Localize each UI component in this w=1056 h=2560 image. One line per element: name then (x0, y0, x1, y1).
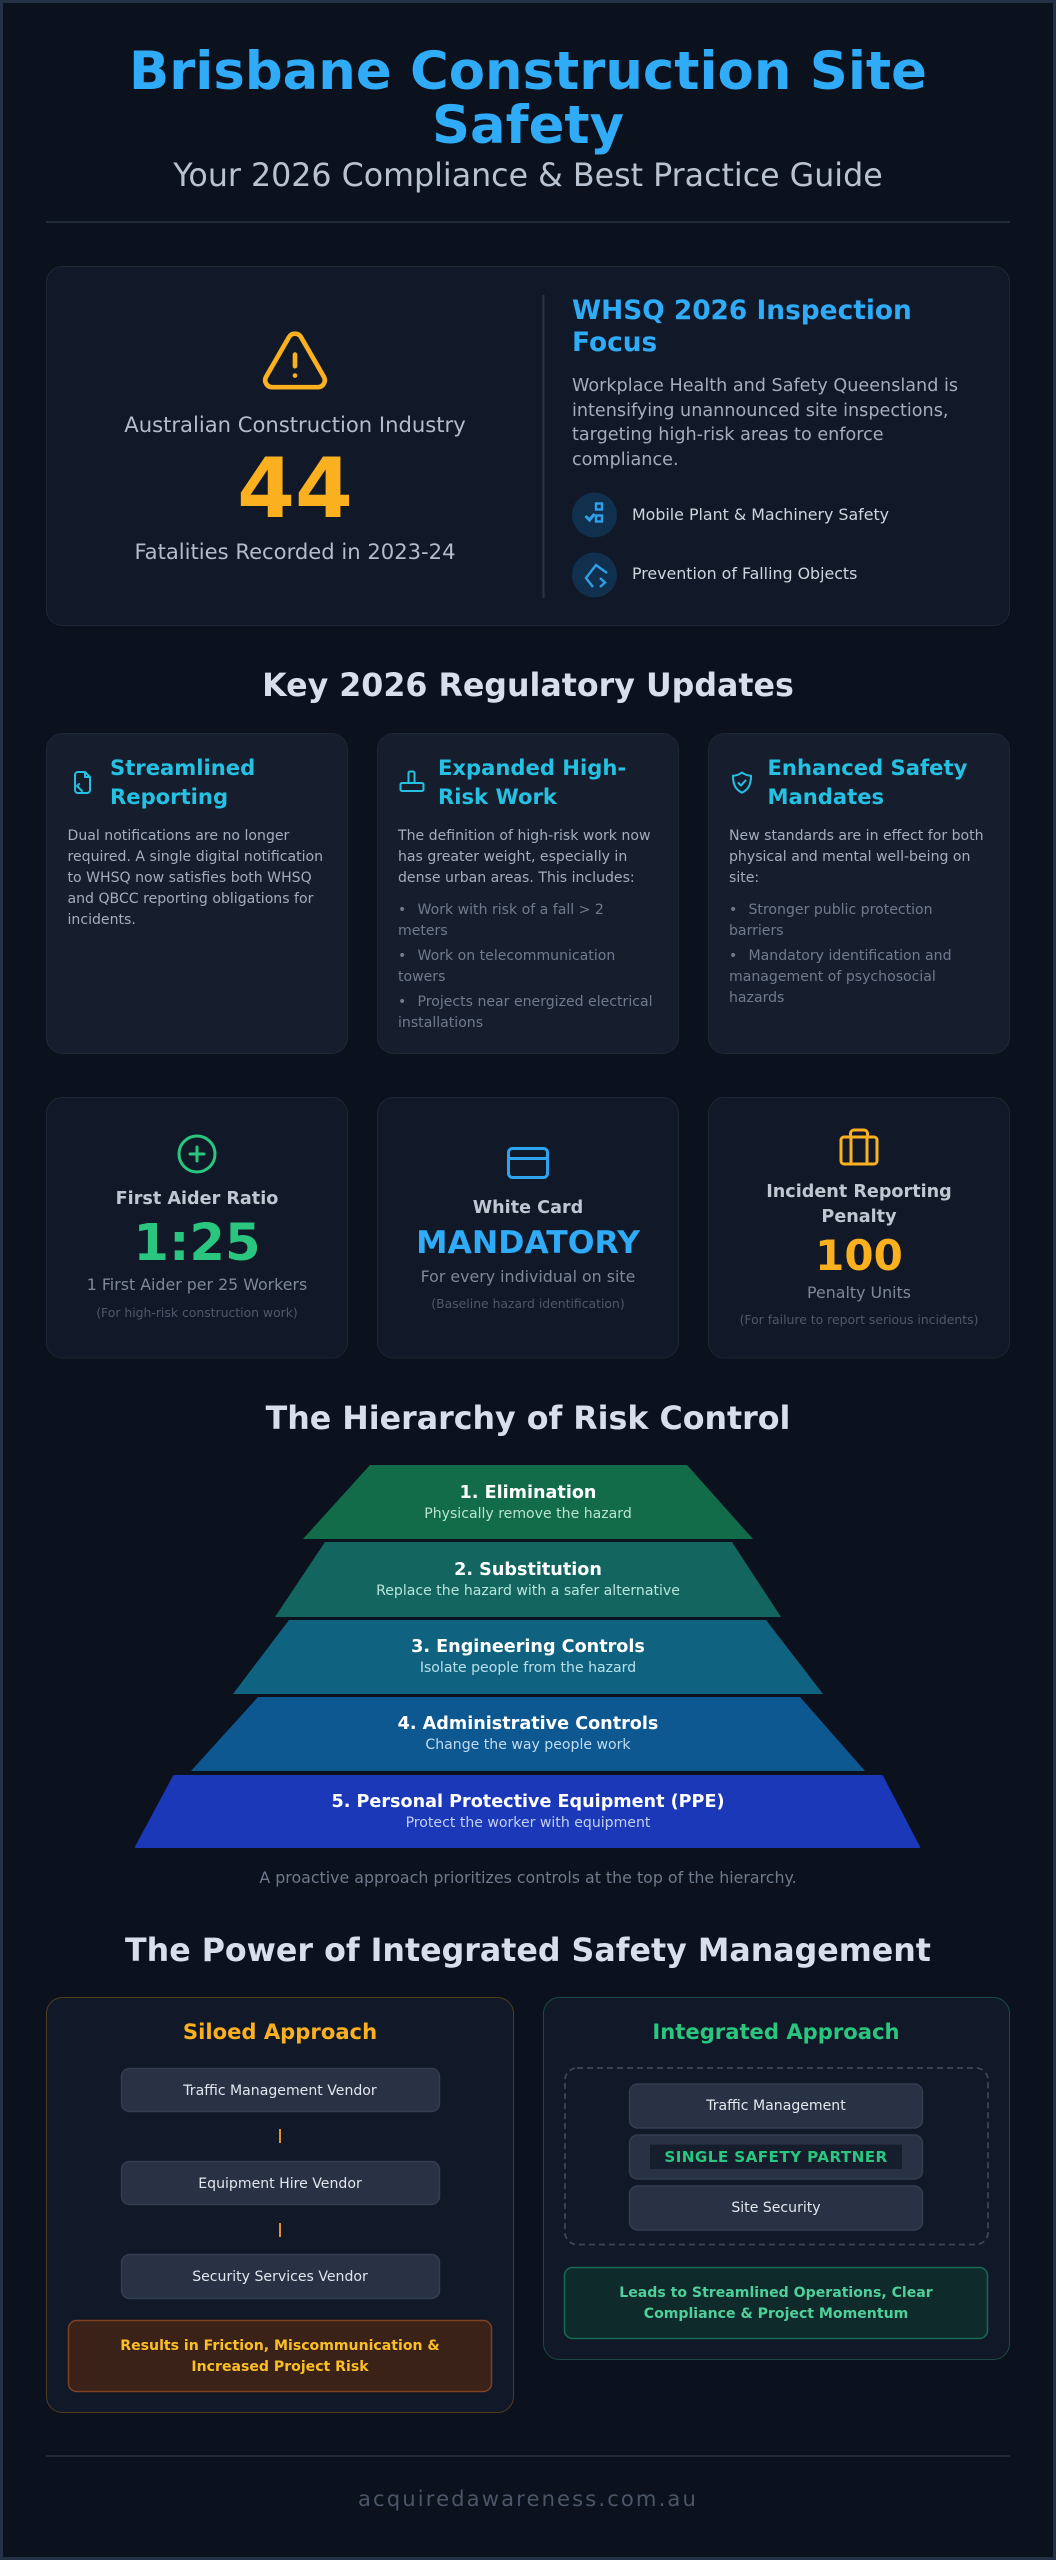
tier 4 (191, 1697, 865, 1771)
item: security (630, 2186, 922, 2230)
tier 4: 4. Administrative Controls (398, 1714, 658, 1734)
panel: white card (378, 1098, 678, 1358)
card text: New standards are in effect for both (729, 828, 984, 844)
connector (279, 2129, 281, 2143)
card heading: Expanded High- (438, 755, 626, 780)
panel: enhanced safety mandates (708, 734, 1010, 1054)
risk list: Projects near energized electrical (418, 994, 653, 1010)
card heading (768, 755, 968, 809)
card text: required. A single digital notification (68, 849, 323, 865)
header (46, 41, 1010, 223)
connector (279, 2223, 281, 2237)
tier 3: Isolate people from the hazard (420, 1660, 636, 1676)
tier 2: 2. Substitution (454, 1560, 602, 1580)
callout: momentum (564, 2268, 988, 2338)
inspection heading: Focus (572, 327, 657, 358)
risk list: Work with risk of a fall > 2 (418, 902, 604, 918)
panel: incident reporting penalty (708, 1098, 1010, 1358)
icon: briefcase (841, 1130, 877, 1164)
icon: plus circle (179, 1136, 215, 1172)
card text (68, 828, 323, 928)
tier 3 (233, 1620, 823, 1694)
callout: friction: Increased Project Risk (191, 2359, 369, 2375)
vendor: traffic: Traffic Management Vendor (182, 2083, 377, 2099)
inspection item: Mobile Plant & Machinery Safety (632, 505, 889, 524)
stat note: 1 First Aider per 25 Workers (87, 1275, 307, 1294)
card heading: Risk Work (438, 784, 558, 809)
card heading (110, 755, 255, 809)
stat footnote: (For failure to report serious incidents) (740, 1312, 978, 1327)
mandate list: hazards (729, 990, 784, 1006)
card text: dense urban areas. This includes: (398, 870, 635, 886)
mandate list: • (729, 902, 737, 918)
item: single safety partner: SINGLE SAFETY PARTNER (664, 2148, 888, 2166)
stat title: White Card (473, 1198, 583, 1218)
tier 1: 1. Elimination (460, 1483, 596, 1503)
callout: friction: Results in Friction, Miscommunication & (120, 2338, 440, 2354)
panel: siloed approach (46, 1998, 514, 2412)
panel: expanded high-risk work (378, 734, 678, 1054)
vendor: equipment (122, 2162, 440, 2204)
panel: integrated approach (544, 1998, 1010, 2360)
vendor: security: Security Services Vendor (192, 2269, 368, 2285)
risk list: meters (398, 923, 448, 939)
tier 2 (275, 1542, 781, 1617)
mandate list: • (729, 948, 737, 964)
footer: acquiredawareness.com.au (358, 2486, 698, 2511)
inspection heading: WHSQ 2026 Inspection (572, 295, 912, 326)
callout: momentum: Leads to Streamlined Operations, Clear (619, 2285, 933, 2301)
item: single safety partner (630, 2135, 922, 2179)
pyramid chart (136, 1465, 919, 1847)
tier 2: Replace the hazard with a safer alternative (376, 1583, 680, 1599)
icon: brush (400, 772, 424, 791)
panel heading: Siloed Approach (183, 2019, 377, 2044)
heading: hierarchy: The Hierarchy of Risk Control (266, 1401, 790, 1437)
stat value: MANDATORY (416, 1225, 641, 1261)
inspection text: Workplace Health and Safety Queensland is (572, 376, 958, 396)
tier 4: Change the way people work (425, 1737, 631, 1753)
stat footnote: (Baseline hazard identification) (431, 1296, 625, 1311)
inspection item: Prevention of Falling Objects (632, 564, 857, 583)
inspection text (572, 376, 958, 470)
inspection text: targeting high-risk areas to enforce (572, 425, 884, 445)
panel: fatalities and inspection focus (46, 266, 1010, 626)
inspection text: compliance. (572, 450, 679, 470)
mandate list: Stronger public protection (748, 902, 933, 918)
panel: streamlined reporting (46, 734, 348, 1054)
stat value: 1:25 (133, 1213, 261, 1273)
stat title (766, 1182, 952, 1227)
stat title: First Aider Ratio (116, 1189, 278, 1209)
icon: shield (733, 772, 751, 793)
icon: falling objects (572, 552, 617, 598)
icon: document (75, 772, 90, 793)
vendor: security (122, 2254, 440, 2298)
risk list: Work on telecommunication (418, 948, 615, 964)
tier 1 (303, 1465, 753, 1539)
mandate list: barriers (729, 923, 784, 939)
mandate list: management of psychosocial (729, 969, 936, 985)
card text: The definition of high-risk work now (397, 828, 650, 844)
callout: momentum: Compliance & Project Momentum (644, 2306, 908, 2322)
tier 5: Protect the worker with equipment (406, 1815, 651, 1831)
stat footnote: (For high-risk construction work) (96, 1305, 298, 1320)
tier 5 (136, 1776, 919, 1847)
stat title: Incident Reporting (766, 1182, 952, 1202)
risk list: • (398, 994, 406, 1010)
panel: first aider ratio (46, 1098, 348, 1358)
card heading: Mandates (768, 784, 884, 809)
card text: has greater weight, especially in (398, 849, 627, 865)
card text: and QBCC reporting obligations for (68, 891, 314, 907)
item: security: Site Security (731, 2200, 821, 2216)
stat value: 100 (815, 1231, 903, 1280)
subtitle: Your 2026 Compliance & Best Practice Guide (172, 158, 883, 194)
heading: integrated safety: The Power of Integrated Safety Management (125, 1933, 931, 1969)
stat label: Australian Construction Industry (124, 412, 466, 437)
card text: to WHSQ now satisfies both WHSQ (68, 870, 312, 886)
stat note: For every individual on site (421, 1267, 635, 1286)
card text: incidents. (68, 912, 136, 928)
vendor: equipment: Equipment Hire Vendor (198, 2176, 362, 2192)
inspection heading (572, 295, 912, 358)
icon: card (508, 1148, 548, 1178)
title (129, 41, 927, 156)
card heading: Streamlined (110, 755, 255, 780)
inspection text: intensifying unannounced site inspections, (572, 401, 948, 421)
panel heading: Integrated Approach (652, 2019, 900, 2044)
card text: site: (729, 870, 759, 886)
item: traffic: Traffic Management (705, 2098, 846, 2114)
card text: physical and mental well-being on (729, 849, 970, 865)
card text: Dual notifications are no longer (68, 828, 290, 844)
title: Brisbane Construction Site (129, 41, 927, 102)
card heading: Reporting (110, 784, 228, 809)
icon: machinery (572, 492, 617, 538)
stat caption: Fatalities Recorded in 2023-24 (134, 539, 456, 564)
callout: friction (68, 2320, 492, 2392)
risk list: • (398, 902, 406, 918)
fatalities number: 44 (237, 440, 353, 537)
mandate list: Mandatory identification and (748, 948, 952, 964)
title: Safety (432, 95, 624, 156)
heading: regulatory updates: Key 2026 Regulatory Updates (262, 668, 794, 704)
item: traffic (630, 2084, 922, 2128)
card heading: Enhanced Safety (768, 755, 968, 780)
card text (729, 828, 984, 886)
dashed group (565, 2068, 988, 2244)
stat note: Penalty Units (807, 1283, 911, 1302)
pyramid caption: A proactive approach prioritizes controls at the top of the hierarchy. (259, 1868, 797, 1887)
tier 5: 5. Personal Protective Equipment (PPE) (331, 1792, 725, 1812)
card text (397, 828, 650, 886)
risk list: towers (398, 969, 445, 985)
vendor: traffic (122, 2068, 440, 2112)
mandate list (729, 902, 952, 1006)
risk list (398, 902, 653, 1031)
icon: warning triangle (265, 334, 325, 387)
card heading (438, 755, 626, 809)
tier 3: 3. Engineering Controls (411, 1637, 645, 1657)
risk list: • (398, 948, 406, 964)
risk list: installations (398, 1015, 483, 1031)
tier 1: Physically remove the hazard (424, 1506, 632, 1522)
stat title: Penalty (821, 1207, 897, 1227)
